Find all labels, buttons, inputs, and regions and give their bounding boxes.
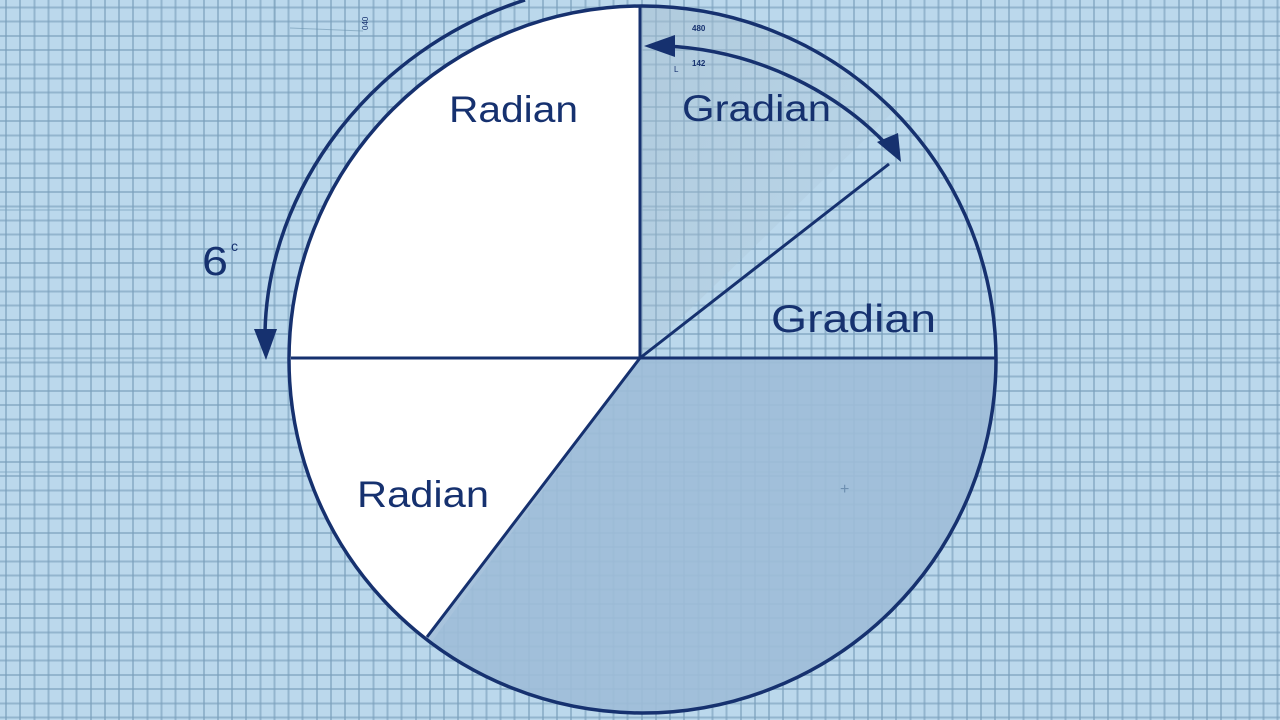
small tick labels: L	[674, 65, 679, 74]
label: upper Gradian: Gradian	[682, 88, 831, 129]
small tick labels: 480	[692, 24, 706, 33]
label: 6 c	[202, 238, 238, 284]
label: 6 c: 6	[202, 238, 228, 284]
pie chart: radian and gradian circle	[280, 0, 1000, 720]
small tick labels: 040	[361, 16, 370, 30]
label: lower Gradian: Gradian	[771, 298, 936, 341]
arrow: gradian arc	[644, 35, 901, 162]
sector: upper gradian tint	[642, 8, 869, 354]
spokes	[291, 5, 996, 637]
small tick labels	[361, 16, 706, 74]
sector: lower-right shaded	[427, 360, 994, 712]
small tick labels: 142	[692, 59, 706, 68]
label: upper-left Radian: Radian	[449, 89, 578, 130]
label: lower-left Radian: Radian	[357, 474, 489, 515]
label: 6 c: c	[231, 238, 238, 254]
arrow: outer left arc	[254, 0, 525, 360]
sector: lower-left radian	[290, 358, 637, 640]
sector: upper-left radian	[280, 0, 640, 358]
small plus mark: +	[840, 481, 849, 498]
circle outline	[289, 6, 996, 713]
